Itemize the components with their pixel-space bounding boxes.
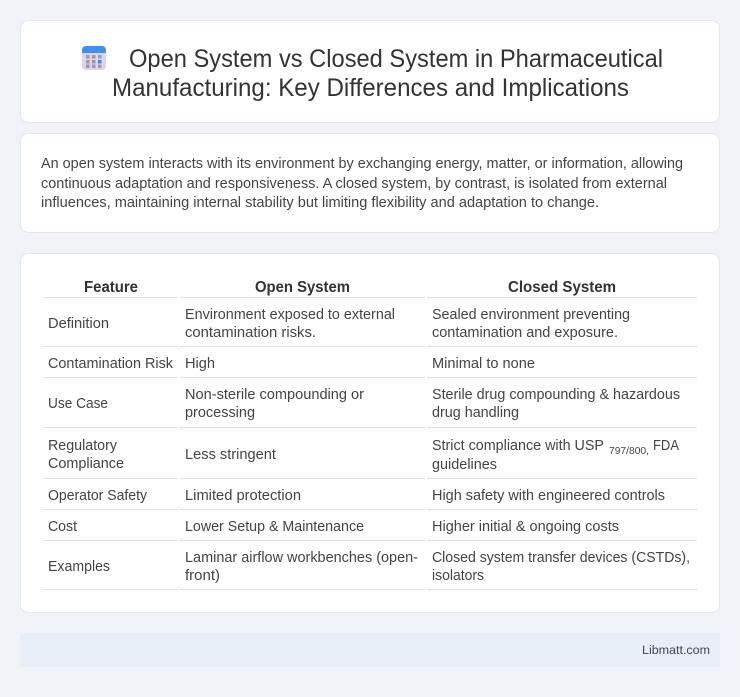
row: examples: Closed system transfer devices (CSTDs), bbox=[432, 550, 690, 566]
row: operator safety: Limited protection bbox=[185, 488, 301, 504]
row: operator safety bbox=[48, 488, 665, 504]
row: definition: Environment exposed to external bbox=[185, 307, 395, 323]
row: contamination risk bbox=[48, 356, 535, 372]
intro text: influences, maintaining internal stability but limiting flexibility and adaptation to change. bbox=[41, 195, 599, 211]
row: cost: Higher initial & ongoing costs bbox=[432, 519, 619, 535]
row: examples bbox=[48, 550, 690, 584]
row: use case: Sterile drug compounding & hazardous bbox=[432, 387, 680, 403]
intro text: An open system interacts with its environment by exchanging energy, matter, or information, allowing bbox=[41, 156, 683, 172]
icon: calendar bbox=[82, 46, 106, 70]
row: cost: Lower Setup & Maintenance bbox=[185, 519, 364, 535]
row: use case: processing bbox=[185, 405, 255, 421]
row: regulatory compliance: guidelines bbox=[432, 457, 497, 473]
row: examples: isolators bbox=[432, 568, 484, 584]
table header bbox=[84, 279, 616, 296]
footer credit: Libmatt.com bbox=[642, 643, 710, 657]
row: contamination risk: Minimal to none bbox=[432, 356, 535, 372]
row: examples: front) bbox=[185, 568, 220, 584]
row: operator safety: High safety with engineered controls bbox=[432, 488, 665, 504]
row: definition: Definition bbox=[48, 316, 109, 332]
row: regulatory compliance: Less stringent bbox=[185, 447, 276, 463]
row: regulatory compliance: 797/800, bbox=[609, 445, 649, 457]
comparison table panel bbox=[20, 254, 720, 612]
row: contamination risk: High bbox=[185, 356, 215, 372]
row: cost: Cost bbox=[48, 519, 77, 535]
row: definition: contamination and exposure. bbox=[432, 325, 618, 341]
row: use case bbox=[48, 387, 680, 421]
title bbox=[112, 45, 663, 102]
row: definition: contamination risks. bbox=[185, 325, 316, 341]
title panel bbox=[20, 20, 720, 122]
row: regulatory compliance: Regulatory bbox=[48, 438, 118, 454]
row: use case: drug handling bbox=[432, 405, 519, 421]
title: Manufacturing: Key Differences and Implications bbox=[112, 74, 629, 102]
row: regulatory compliance bbox=[48, 438, 679, 473]
table header: Feature bbox=[84, 279, 138, 296]
row: examples: Laminar airflow workbenches (open- bbox=[185, 550, 418, 566]
row: regulatory compliance: FDA bbox=[653, 438, 679, 454]
row: regulatory compliance: Compliance bbox=[48, 456, 124, 472]
row: use case: Use Case bbox=[48, 396, 108, 412]
intro text: continuous adaptation and responsiveness. A closed system, by contrast, is isolated from external bbox=[41, 176, 667, 192]
footer bar bbox=[20, 633, 720, 667]
row: contamination risk: Contamination Risk bbox=[48, 356, 174, 372]
row: use case: Non-sterile compounding or bbox=[185, 387, 364, 403]
intro panel bbox=[20, 134, 720, 232]
row: definition: Sealed environment preventing bbox=[432, 307, 630, 323]
row: examples: Examples bbox=[48, 559, 110, 575]
row: regulatory compliance: Strict compliance with USP bbox=[432, 438, 604, 454]
row: definition bbox=[48, 307, 630, 341]
title: Open System vs Closed System in Pharmaceutical bbox=[129, 45, 663, 73]
table header: Closed System bbox=[508, 279, 616, 296]
row: operator safety: Operator Safety bbox=[48, 488, 148, 504]
intro text bbox=[41, 156, 683, 211]
row: cost bbox=[48, 519, 619, 535]
table header: Open System bbox=[255, 279, 350, 296]
